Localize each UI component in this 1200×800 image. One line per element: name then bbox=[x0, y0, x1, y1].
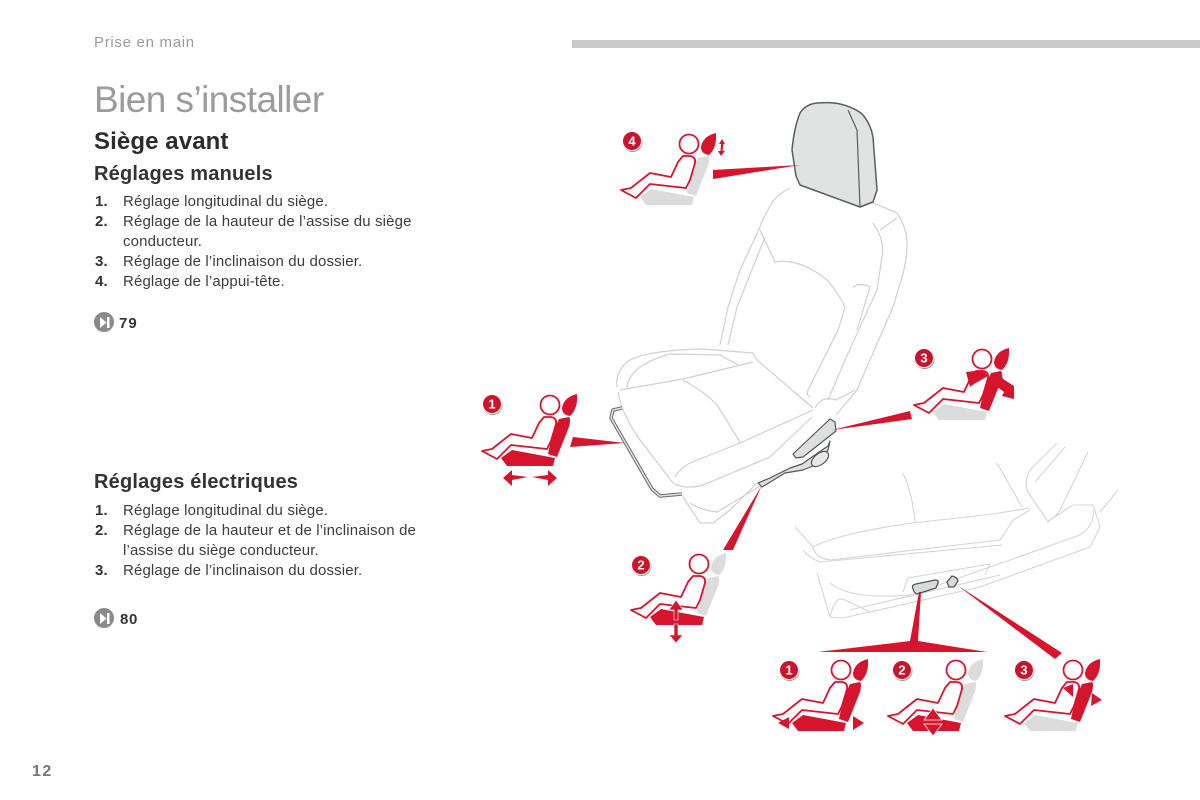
page number: 12 bbox=[32, 763, 53, 780]
heading: siège avant: Siège avant bbox=[94, 128, 228, 155]
pointer: switch to lower icons bbox=[818, 592, 987, 652]
list: réglages électriques: Réglage de l’inclinaison du dossier. bbox=[123, 562, 362, 579]
header bar bbox=[572, 40, 1200, 48]
lower icon 3: backrest bbox=[1005, 659, 1102, 731]
badge 4: 4 bbox=[628, 134, 636, 148]
list: réglages manuels: 4. bbox=[95, 273, 108, 290]
pointer: rail to icon 1 bbox=[570, 437, 625, 447]
section label: Prise en main bbox=[94, 34, 195, 51]
list: réglages manuels: Réglage de l’inclinaison du dossier. bbox=[123, 253, 362, 270]
badge 2 bbox=[632, 556, 652, 576]
badge 1: 1 bbox=[488, 396, 496, 412]
list: réglages électriques: Réglage de la hauteur et de l’inclinaison de bbox=[123, 522, 416, 539]
list: réglages manuels: conducteur. bbox=[123, 233, 202, 250]
badge 3: 3 bbox=[920, 350, 928, 366]
list: réglages électriques: 3. bbox=[95, 562, 108, 579]
list: réglages manuels: 2. bbox=[95, 213, 108, 230]
list: réglages électriques: Réglage longitudinal du siège. bbox=[123, 502, 328, 519]
lower badge 3: 3 bbox=[1020, 662, 1028, 678]
lower seat bbox=[795, 443, 1118, 618]
lower badge 1 bbox=[780, 660, 800, 681]
list: réglages électriques: l’assise du siège conducteur. bbox=[123, 542, 319, 559]
lower seat switches bbox=[912, 576, 958, 594]
badge 1 bbox=[482, 394, 502, 415]
list: réglages manuels: 3. bbox=[95, 253, 108, 270]
icon 2: height adjustment bbox=[631, 553, 726, 643]
list: réglages électriques: 2. bbox=[95, 522, 108, 539]
lower badge 2: 2 bbox=[898, 662, 906, 678]
icon 4: headrest adjustment bbox=[621, 133, 725, 205]
lower icon 1: longitudinal bbox=[773, 659, 868, 731]
seat levers bbox=[758, 419, 836, 487]
list: réglages manuels: Réglage de l’appui-tête. bbox=[123, 273, 285, 290]
badge 3 bbox=[914, 348, 934, 369]
page reference 80: 80 bbox=[120, 611, 138, 628]
pointer: handle to icon 2 bbox=[723, 485, 762, 550]
pointer: lever to icon 3 bbox=[832, 411, 912, 430]
lower badge 2 bbox=[892, 660, 912, 681]
list: réglages manuels: Réglage longitudinal du siège. bbox=[123, 193, 328, 210]
badge 2: 2 bbox=[637, 558, 645, 572]
main seat: backrest bbox=[720, 188, 907, 415]
seat rail bar bbox=[611, 408, 682, 496]
lower icon 2: height and tilt bbox=[888, 659, 983, 736]
title: Bien s’installer bbox=[94, 79, 324, 120]
list: réglages électriques: 1. bbox=[95, 502, 108, 519]
lower badge 1: 1 bbox=[785, 662, 793, 678]
headrest bbox=[792, 103, 877, 207]
lower badge 3 bbox=[1014, 660, 1034, 681]
heading: réglages manuels: Réglages manuels bbox=[94, 163, 273, 185]
list: réglages manuels bbox=[95, 193, 412, 290]
icon 3: backrest adjustment bbox=[914, 348, 1014, 420]
list: réglages manuels: Réglage de la hauteur de l’assise du siège bbox=[123, 213, 412, 230]
main seat: cushion bbox=[617, 349, 855, 523]
page reference 79: 79 bbox=[119, 315, 138, 332]
heading: réglages électriques: Réglages électriques bbox=[94, 471, 298, 493]
page reference 80 bbox=[94, 608, 138, 628]
list: réglages manuels: 1. bbox=[95, 193, 108, 210]
page reference 79 bbox=[94, 312, 138, 332]
pointer: knob to lower icon 3 bbox=[957, 585, 1062, 659]
list: réglages électriques bbox=[95, 502, 416, 579]
badge 4 bbox=[622, 132, 642, 152]
pointer: headrest to icon 4 bbox=[713, 165, 800, 179]
icon 1: longitudinal adjustment bbox=[482, 394, 577, 486]
